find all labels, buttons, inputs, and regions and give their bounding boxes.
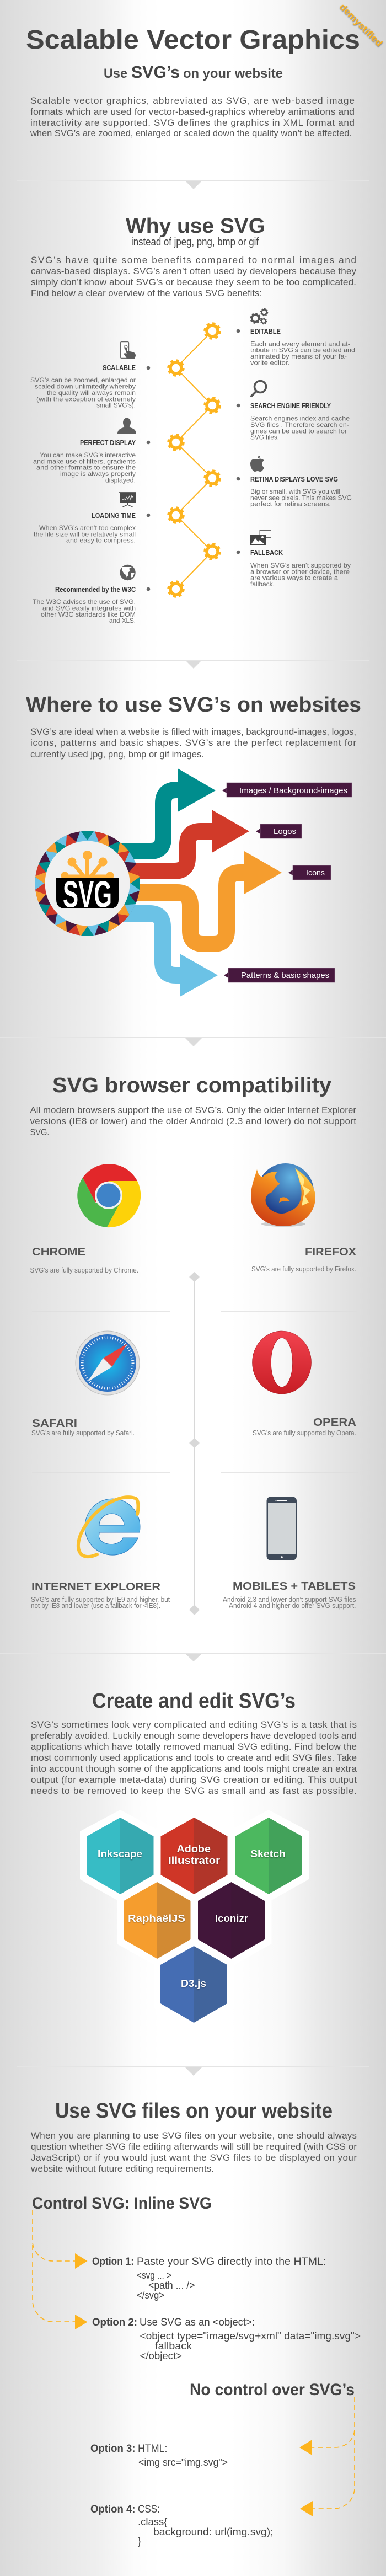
benefit: perfect display: You can make SVG’s interactive [40,451,136,459]
icon: opera logo [253,1331,311,1394]
hexagon white backing [80,1810,309,2030]
hexagon: d3.js [160,1946,227,2023]
benefits timeline: connecting line [176,331,212,589]
create paragraph: most commonly used applications and tools to create and edit SVG files. Take [31,1752,357,1763]
icon: person [117,418,136,434]
subtitle: Use [104,66,127,81]
benefits timeline: gears [168,323,220,597]
subtitle: on your website [183,66,283,81]
option 2: Option 2: [92,2317,137,2328]
intro paragraph: formats which are used for vector-based-graphics whereby animations and [30,106,355,117]
benefit: scalable: small SVG’s). [96,402,136,409]
benefit: search engine friendly: SVG files . Therefore search en- [250,421,349,429]
triangle ring [34,830,141,937]
benefit: search engine friendly [250,381,350,441]
benefit: fallback: FALLBACK [250,548,283,557]
intro paragraph: when SVG’s are zoomed, enlarged or scaled down the quality won’t be affected. [30,128,352,138]
icon: chrome logo [77,1164,141,1227]
devices: mobiles and tablets: MOBILES + TABLETS [233,1580,356,1592]
option 1 [92,2256,326,2301]
SVG logo badge with triangle ring: SVG [63,874,112,916]
devices: mobiles and tablets [223,1497,356,1610]
heading: control SVG inline: Control SVG: Inline SVG [32,2194,212,2212]
label: icons [288,865,331,880]
browser: opera: OPERA [313,1417,356,1429]
subheading: instead of: instead of jpeg, png, bmp or gif [131,236,259,248]
heading: where to use: Where to use SVG’s on websites [26,693,361,717]
benefit: editable: tribute in SVG’s can be edited and [250,346,355,354]
create paragraph: SVG’s sometimes look very complicated and editing SVG’s is a task that is [31,1719,357,1730]
label: images / background-images: Images / Background-images [239,786,347,795]
use paragraph: When you are planning to use SVG files on your website, one should always [31,2130,357,2141]
benefit: retina displays [250,456,352,508]
option 1: Paste your SVG directly into the HTML: [137,2256,326,2268]
logo box [56,878,119,908]
why paragraph: SVG’s have quite some benefits compared to normal images and [31,255,356,265]
benefit: recommended by the W3C: Recommended by the W3C [55,585,136,594]
why paragraph: Find below a clear overview of the various SVG benefits: [31,288,262,298]
benefit: retina displays: Big or small, with SVG you will [250,488,340,495]
benefit: recommended by the W3C: other W3C standards like DOM [41,611,136,618]
browser: firefox [251,1163,357,1273]
hexagon: adobe illustrator [161,1818,227,1894]
label: logos: Logos [274,827,296,836]
hexagon: raphaeljs [124,1882,191,1959]
benefit: fallback: fallback. [250,580,275,588]
dashed arrow to option 4 [300,2431,355,2516]
heading: create and edit: Create and edit SVG’s [92,1690,296,1713]
create paragraph: applications which have totally removed manual SVG editing. Find below the [31,1741,357,1752]
arrow: teal to images [116,768,216,851]
benefit: loading time: and easy to compress. [66,537,136,544]
option 2: </object> [140,2350,182,2361]
label: patterns and basic shapes [224,968,335,982]
heading: use SVG files: Use SVG files on your website [55,2099,333,2123]
icon: safari compass [76,1331,140,1395]
use paragraph: question whether SVG file editing afterwards will still be required (with CSS or [31,2141,357,2152]
section: introduction [26,2,384,138]
option 2: Use SVG as an <object>: [140,2317,255,2328]
create paragraph: needs to be removed to keep the SVG as small and as fast as possible. [31,1786,357,1796]
benefit: retina displays: perfect for retina screens. [250,500,331,508]
benefit: search engine friendly: Search engines index and cache [250,415,350,423]
label: patterns and basic shapes: Patterns & basic shapes [241,971,329,980]
compatibility paragraph: versions (IE8 or lower) and the older Android (2.3 and lower) do not support [30,1116,356,1126]
icon: apple [250,456,264,472]
main title: Scalable Vector Graphics [26,25,360,55]
benefit: scalable: SVG’s can be zoomed, enlarged or [30,376,136,384]
hexagon: raphaeljs: RaphaëlJS [128,1913,185,1924]
option 4: CSS: [138,2504,160,2515]
icon: gears [250,309,267,324]
why paragraph: simply don’t know about SVG’s or because they seem to be too complicated. [31,277,356,287]
option 3: HTML: [138,2443,168,2455]
icon: IE logo [78,1497,140,1557]
dashed arrow to option 3 [299,2397,355,2455]
benefit: perfect display: and make use of filters, gradients [33,457,136,465]
intro paragraph: interactivity are supported. SVG defines the graphics in XML format and [30,117,355,128]
hexagon: iconizr [198,1882,265,1959]
icon: orange burst [61,851,114,879]
benefit: editable: EDITABLE [250,327,281,335]
create paragraph [31,1719,357,1796]
hexagon: inkscape [87,1818,153,1894]
benefit: recommended by the W3C: and SVG easily integrates with [42,605,136,612]
benefit: retina displays: RETINA DISPLAYS LOVE SVG [250,475,338,483]
benefit: fallback [250,531,351,588]
why paragraph: canvas-based displays. SVG’s aren’t often used by developers because they [31,266,356,276]
subtitle [104,62,283,82]
where paragraph [30,726,356,760]
hexagon: adobe illustrator: Illustrator [168,1855,220,1866]
benefit: fallback: a browser or other device, there [250,568,350,575]
option 2 [92,2317,361,2361]
benefit: recommended by the W3C: and XLS. [109,617,136,624]
arrow: orange to icons [130,851,282,944]
intro paragraph: Scalable vector graphics, abbreviated as SVG, are web-based image [30,95,355,106]
benefits timeline: dots [147,329,240,591]
hexagon: iconizr: Iconizr [215,1913,248,1924]
benefit: scalable [30,342,136,409]
benefit: editable: vorite editor. [250,359,290,366]
benefit: perfect display: image is always properly [60,470,136,478]
subtitle: SVG’s [131,62,180,82]
benefit: scalable: the quality will always remain [47,389,136,397]
icon: presentation board [119,492,136,507]
benefit: fallback: When SVG’s aren’t supported by [250,562,351,569]
hexagon: inkscape: Inkscape [98,1848,142,1859]
label: icons: Icons [306,868,325,878]
benefit: search engine friendly: gines can be used to search for [250,427,347,435]
hexagon: d3.js: D3.js [181,1978,206,1989]
browser: safari: SVG’s are fully supported by Safari. [31,1429,135,1437]
option 4: Option 4: [90,2504,136,2515]
browser: safari [31,1331,140,1437]
option 4 [90,2504,274,2547]
browser: internet explorer [31,1497,170,1610]
benefit: scalable: scaled down unlimitedly whereby [35,383,136,391]
browser: internet explorer: INTERNET EXPLORER [31,1581,161,1593]
option 1: <svg ... > [137,2270,171,2281]
SVG logo badge with triangle ring [34,830,141,937]
benefit: editable: animated by means of your fa- [250,352,347,360]
hexagon: sketch [235,1818,302,1894]
demystified ribbon text: demystified [337,2,384,49]
benefit: loading time: LOADING TIME [92,511,136,520]
browser: internet explorer: not by IE8 and lower (use a fallback for <IE8). [31,1601,160,1610]
benefit: loading time: When SVG’s aren’t too complex [39,524,136,532]
benefit: recommended by the W3C: The W3C advises the use of SVG, [33,598,136,606]
section divider [17,180,369,189]
benefit: scalable: SCALABLE [103,364,136,372]
label: logos [256,824,302,838]
option 4: .class{ [138,2516,168,2527]
compatibility paragraph: All modern browsers support the use of SVG’s. Only the older Internet Explorer [30,1105,356,1115]
option 3: <img src="img.svg"> [138,2457,228,2468]
benefit: search engine friendly: SEARCH ENGINE FRIENDLY [250,402,331,410]
use paragraph [30,2130,357,2174]
benefit: perfect display [33,418,136,484]
option 2: <object type="image/svg+xml" data="img.svg"> [140,2331,361,2342]
label: images / background-images [222,783,352,797]
option 2: fallback [155,2340,192,2351]
browser: safari: SAFARI [32,1418,77,1430]
create paragraph: preferably avoided. Luckily enough some developers have developed tools and [31,1730,357,1741]
benefit: editable: Each and every element and at- [250,340,350,348]
dashed arrow to option 1 [33,2210,87,2269]
icon: firefox logo [251,1163,315,1227]
browser: opera [253,1331,356,1437]
benefit: loading time [34,492,136,544]
icon: image frames [250,531,271,545]
option 4: background: url(img.svg); [153,2526,274,2537]
benefit: perfect display: PERFECT DISPLAY [80,439,136,447]
horizontal separators [32,1311,358,1473]
browser: internet explorer: SVG’s are fully supported by IE9 and higher, but [31,1595,170,1604]
option 1: <path ... /> [148,2280,195,2291]
benefit: perfect display: displayed. [105,477,136,484]
section divider [0,1653,386,1661]
benefit: loading time: the file size will be relatively small [34,530,136,538]
create paragraph: output (for example meta-data) during SVG creation or editing. This output [31,1775,357,1785]
browser: chrome [30,1164,141,1274]
hexagon: sketch: Sketch [250,1848,286,1859]
use paragraph: website without future editing requirements. [30,2163,214,2174]
central vertical connector with diamonds [189,1272,200,1615]
use paragraph: JavaScript) or if you would just want the SVG files to be displayed on your [31,2152,357,2163]
option 3: Option 3: [90,2443,136,2455]
compatibility paragraph [30,1105,356,1137]
browser: firefox: SVG’s are fully supported by Firefox. [251,1265,356,1273]
option 4: } [138,2536,141,2547]
section divider [0,1037,386,1046]
why paragraph [31,255,356,298]
heading: no control: No control over SVG’s [190,2381,355,2399]
browser: firefox: FIREFOX [305,1246,357,1258]
hexagon: adobe illustrator: Adobe [176,1843,211,1854]
compatibility paragraph: SVG. [30,1127,50,1137]
benefit: recommended by the W3C [33,565,136,624]
devices: mobiles and tablets: Android 4 and higher do offer SVG support. [229,1601,356,1610]
icon: phone and hand [120,342,136,359]
arrow: red to logos [127,810,249,871]
heading: browser compatibility: SVG browser compatibility [52,1074,331,1097]
browser: chrome: SVG’s are fully supported by Chrome. [30,1266,138,1274]
arrow: blue to patterns [119,913,218,997]
where paragraph: SVG’s are ideal when a website is filled with images, background-images, logos, [30,726,356,737]
section divider [17,660,369,669]
dashed arrow to option 2 [33,2245,87,2329]
devices: mobiles and tablets: Android 2.3 and lower don’t support SVG files [223,1595,356,1604]
where paragraph: icons, patterns and basic shapes. SVG’s are the perfect replacement for [30,737,356,748]
option 3 [90,2443,228,2468]
benefit: search engine friendly: SVG files. [250,434,279,441]
icon: magnifier [251,381,266,396]
option 1: </svg> [137,2290,164,2301]
heading: why use SVG: Why use SVG [126,215,265,238]
browser: chrome: CHROME [32,1246,85,1258]
benefit: editable [250,309,355,366]
option 1: Option 1: [92,2256,134,2268]
benefit: scalable: (with the exception of extremely [36,395,136,403]
benefit: fallback: are various ways to create a [250,574,338,582]
browser: opera: SVG’s are fully supported by Opera. [253,1429,356,1437]
icon: smartphone [267,1497,297,1560]
section divider [17,2066,369,2076]
create paragraph: into account though some of the applications and tools might create an extra [31,1763,357,1774]
benefit: retina displays: never see pixels. This makes SVG [250,494,352,501]
intro paragraph [30,95,355,138]
where paragraph: currently used jpg, png, bmp or gif images. [30,749,204,760]
benefit: perfect display: and other formats to ensure the [36,464,136,472]
icon: globe [120,565,136,580]
